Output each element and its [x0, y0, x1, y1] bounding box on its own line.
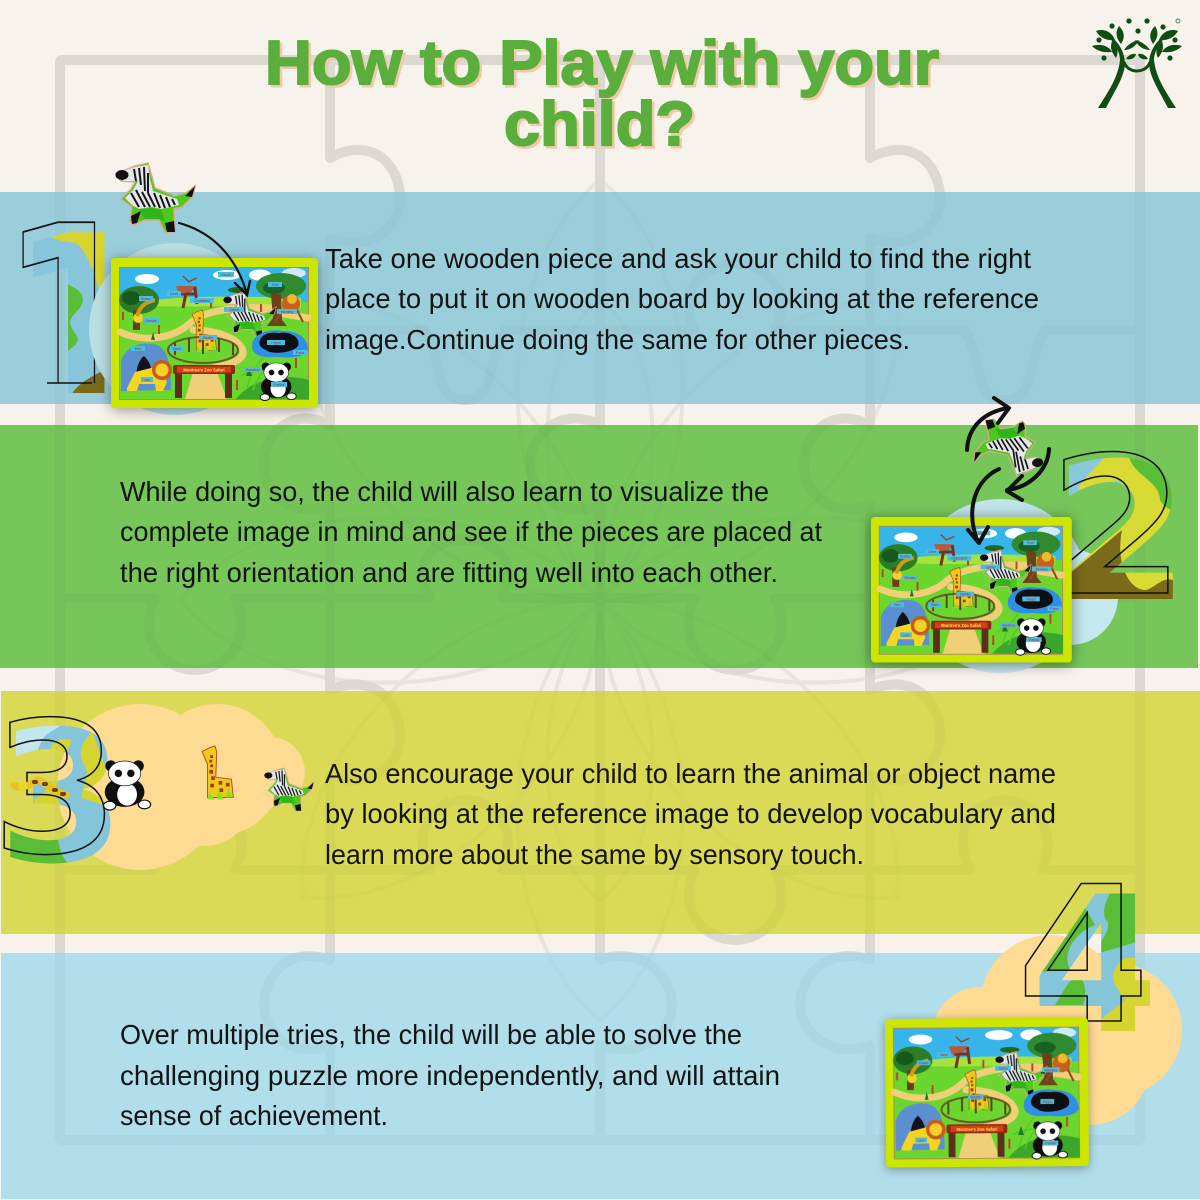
puzzle board 1	[111, 258, 318, 408]
puzzle board 4	[885, 1018, 1089, 1167]
cloud behind board 4	[932, 935, 1182, 1125]
puzzle board 1: Snake	[141, 297, 151, 301]
step 1 numeral: 1	[0, 168, 143, 490]
puzzle board 2: Grassland	[951, 557, 967, 561]
step 4 text	[120, 1019, 780, 1131]
puzzle board 2: Den	[894, 603, 900, 607]
puzzle board 4: Giraffe	[970, 1096, 981, 1100]
puzzle board 1: Panda	[274, 383, 284, 387]
step 4 text: sense of achievement.	[120, 1100, 388, 1131]
icon: zebra puzzle piece	[116, 163, 195, 232]
puzzle board 1: Zebra	[229, 308, 239, 312]
step 4 numeral	[1024, 882, 1150, 1031]
puzzle board 2: Montree's Zoo Safari	[941, 623, 981, 628]
title	[265, 29, 942, 162]
arrows: rotate piece	[967, 398, 1049, 543]
puzzle board 4: Panda	[1045, 1142, 1056, 1146]
step 2 numeral: 2	[1048, 416, 1185, 638]
puzzle board 2: Panda	[1029, 638, 1039, 642]
puzzle board 2: Bamboo	[1002, 624, 1015, 628]
puzzle board 2: Deer	[928, 550, 937, 554]
puzzle board 2: Shrubs	[904, 576, 916, 580]
step 3 text: learn more about the same by sensory touch.	[325, 839, 864, 870]
puzzle board 1: Den	[135, 347, 141, 351]
step 1 text: Take one wooden piece and ask your child to find the right	[325, 243, 1031, 274]
puzzle board 2: Barn	[931, 603, 939, 607]
title: child?	[506, 92, 698, 162]
puzzle board 2: Tree	[1027, 541, 1034, 545]
icon: giraffe piece	[202, 746, 233, 799]
puzzle board 1: Pond	[296, 351, 304, 355]
puzzle board 2: Lion	[903, 633, 909, 637]
step 2 text: the right orientation and are fitting well into each other.	[120, 557, 778, 588]
puzzle board 2: Pond	[1050, 607, 1058, 611]
puzzle board 1: Montree's Zoo Safari	[183, 368, 225, 372]
icon: panda piece	[104, 760, 151, 810]
puzzle board 1: Giraffe	[203, 336, 213, 340]
step 1 text: place to put it on wooden board by looking at the reference	[325, 283, 1039, 314]
icon: snake piece	[14, 780, 66, 795]
puzzle board 1: Hippo	[271, 341, 281, 345]
decorative circles behind board 2	[913, 499, 1118, 673]
step 2 numeral	[1063, 450, 1173, 599]
title: How to Play with your	[265, 29, 939, 98]
step 2 text	[120, 476, 822, 588]
panel: step 2 band	[0, 425, 1198, 668]
puzzle board 1: Cloud	[221, 273, 231, 277]
puzzle board 2	[871, 517, 1072, 662]
puzzle board 1: Shrubs	[145, 319, 157, 323]
title: child?	[504, 90, 695, 159]
step 4 text: challenging puzzle more independently, and will attain	[120, 1060, 780, 1091]
cloud behind animals	[57, 704, 305, 870]
decorative circle behind board 1	[89, 243, 261, 415]
step 3 numeral	[3, 716, 110, 864]
puzzle board 4: Snake	[919, 1061, 929, 1065]
step 1 text: image.Continue doing the same for other pieces.	[325, 324, 910, 355]
step 4 text: Over multiple tries, the child will be able to solve the	[120, 1019, 742, 1050]
puzzle board 2: Snake	[900, 555, 910, 559]
puzzle board 1: Barn	[173, 347, 181, 351]
puzzle board 2: Giraffe	[960, 593, 970, 597]
puzzle board 4: Lion	[918, 1138, 924, 1143]
puzzle board 4: Zebra	[998, 1067, 1008, 1071]
arrow: piece to board	[179, 223, 250, 295]
step 4 numeral: 4	[1017, 846, 1150, 1066]
icon: rotated zebra piece	[969, 413, 1045, 482]
step 2 text: While doing so, the child will also learn to visualize the	[120, 476, 769, 507]
panel: step 3 band	[1, 691, 1200, 934]
step 1 text	[325, 243, 1039, 355]
puzzle board 1: Tree	[271, 283, 279, 287]
puzzle board 1: Bamboo	[246, 368, 260, 372]
step 3 text	[325, 758, 1056, 870]
puzzle board 1: Lion	[144, 378, 150, 382]
panel: step 1 band	[0, 192, 1200, 404]
puzzle board 2: Cloud	[978, 531, 987, 535]
icon: brand logo tree	[1092, 18, 1182, 108]
puzzle board 4: Deer	[940, 1053, 949, 1057]
puzzle board 4: Hippo	[1043, 1100, 1052, 1104]
step 3 text: Also encourage your child to learn the animal or object name	[325, 758, 1056, 789]
step 2 text: complete image in mind and see if the pieces are placed at	[120, 516, 822, 547]
puzzle board 2: Hippo	[1026, 597, 1036, 601]
puzzle board 1: Monkey	[281, 310, 293, 314]
puzzle board 1: Grassland	[194, 299, 210, 303]
icon: small zebra piece	[264, 768, 314, 811]
panel: step 4 band	[1, 953, 1200, 1199]
puzzle board 4: Monkey	[1045, 1068, 1057, 1072]
puzzle board 2: Monkey	[1036, 567, 1048, 571]
puzzle board 1: Deer	[170, 292, 179, 296]
puzzle board 4: Montree's Zoo Safari	[957, 1127, 997, 1132]
step 3 text: by looking at the reference image to develop vocabulary and	[325, 798, 1056, 829]
puzzle board 2: Zebra	[986, 565, 995, 569]
title: How to Play with your	[268, 32, 942, 100]
